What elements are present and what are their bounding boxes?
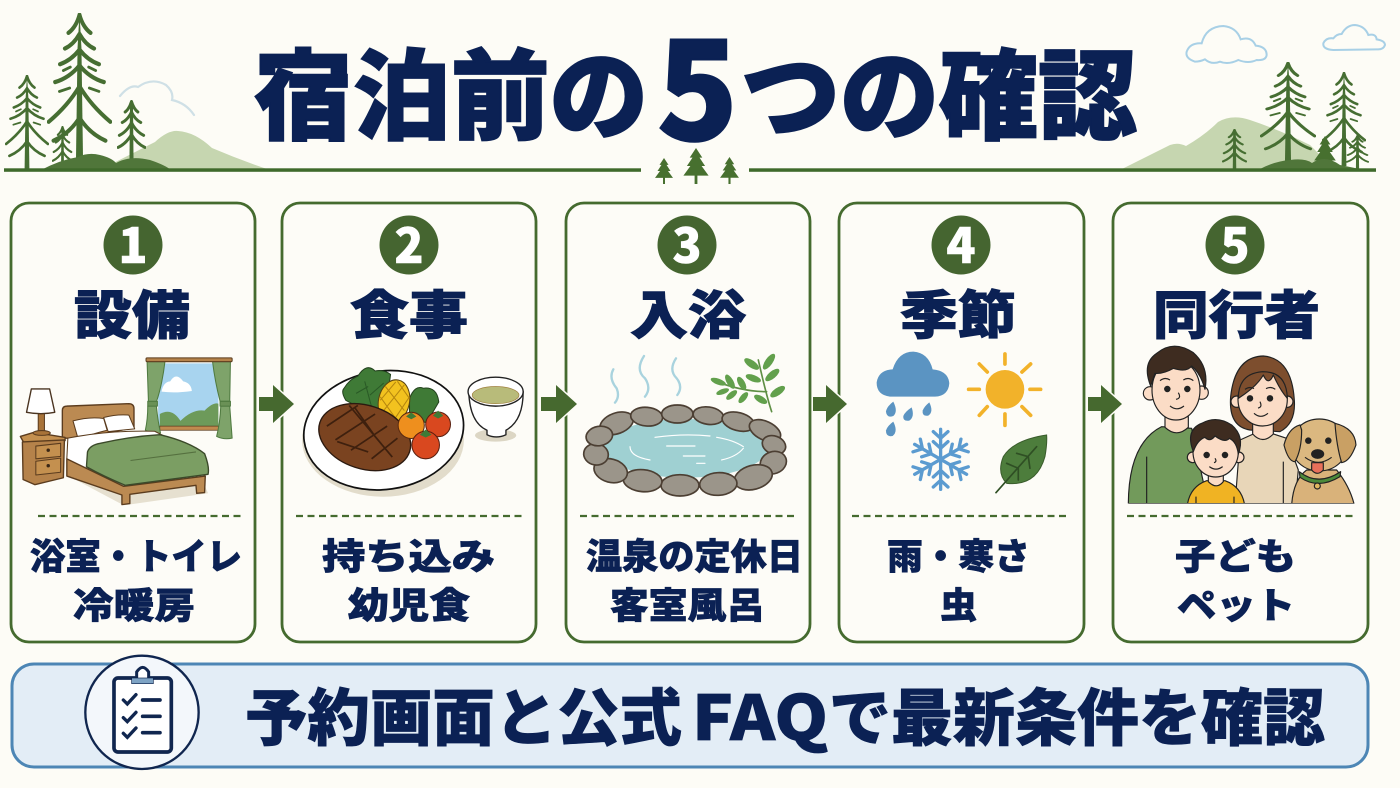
icon: weather [877, 352, 1047, 493]
heading: 入浴: 入浴 [630, 274, 746, 349]
panel: 同行者 [1113, 203, 1368, 642]
text: banner message [245, 668, 1325, 758]
arrow 4 [1088, 385, 1122, 423]
heading: 季節: 季節 [900, 274, 1016, 349]
badge 3 [658, 207, 716, 277]
arrow 2 [541, 385, 577, 423]
panel: 食事 [282, 203, 536, 642]
badge 2 [380, 207, 438, 277]
text: checks [322, 528, 495, 629]
badge 4: 4 [946, 207, 976, 277]
heading: 設備: 設備 [74, 274, 190, 349]
panel: 入浴 [566, 203, 810, 642]
text: checks [586, 528, 803, 629]
text: checks: 幼児食 [348, 577, 470, 629]
arrow 1 [259, 385, 294, 423]
text: banner message: FAQ [692, 668, 828, 758]
heading: 食事: 食事 [350, 274, 468, 349]
forest scene: right [749, 25, 1385, 172]
panel: 設備 [11, 203, 255, 642]
divider [852, 515, 1070, 517]
text: checks: 冷暖房 [73, 577, 195, 629]
title: つの確認 [741, 18, 1137, 160]
icon: clipboard checklist [85, 656, 199, 769]
arrow 3 [813, 385, 847, 423]
badge 1 [104, 207, 162, 277]
text: checks [887, 528, 1030, 629]
divider [1127, 515, 1356, 517]
icon: meal plate [296, 360, 523, 500]
icon: three small trees [655, 148, 739, 184]
divider [38, 515, 243, 517]
footer banner [12, 656, 1368, 769]
text: checks: 浴室・トイレ [30, 528, 242, 580]
panel: 季節 [839, 203, 1084, 642]
text: checks [1175, 528, 1296, 629]
divider [580, 515, 797, 517]
badge 5: 5 [1220, 207, 1250, 277]
heading: 同行者: 同行者 [1153, 274, 1320, 349]
text: banner message: で最新条件を確認 [829, 668, 1325, 758]
forest scene: left [4, 13, 641, 172]
text: checks: ペット [1177, 577, 1295, 629]
text: checks: 虫 [940, 577, 977, 629]
divider [296, 515, 524, 517]
title: 宿泊前の [254, 18, 648, 160]
text: checks [30, 528, 242, 629]
text: checks: 温泉の定休日 [586, 528, 803, 580]
text: checks: 客室風呂 [610, 577, 765, 629]
badge 5 [1206, 207, 1264, 277]
badge 4 [932, 207, 990, 277]
text: banner message: 予約画面と公式 [245, 668, 682, 758]
badge 2: 2 [394, 207, 424, 277]
badge 1: 1 [118, 207, 148, 277]
title [254, 0, 1137, 179]
text: checks: 子ども [1175, 528, 1296, 580]
icon: family with dog [1128, 346, 1356, 505]
icon: hot spring [582, 352, 790, 496]
icon: bedroom [20, 358, 232, 505]
text: checks: 持ち込み [322, 528, 495, 580]
text: checks: 雨・寒さ [887, 528, 1030, 580]
badge 3: 3 [672, 207, 702, 277]
